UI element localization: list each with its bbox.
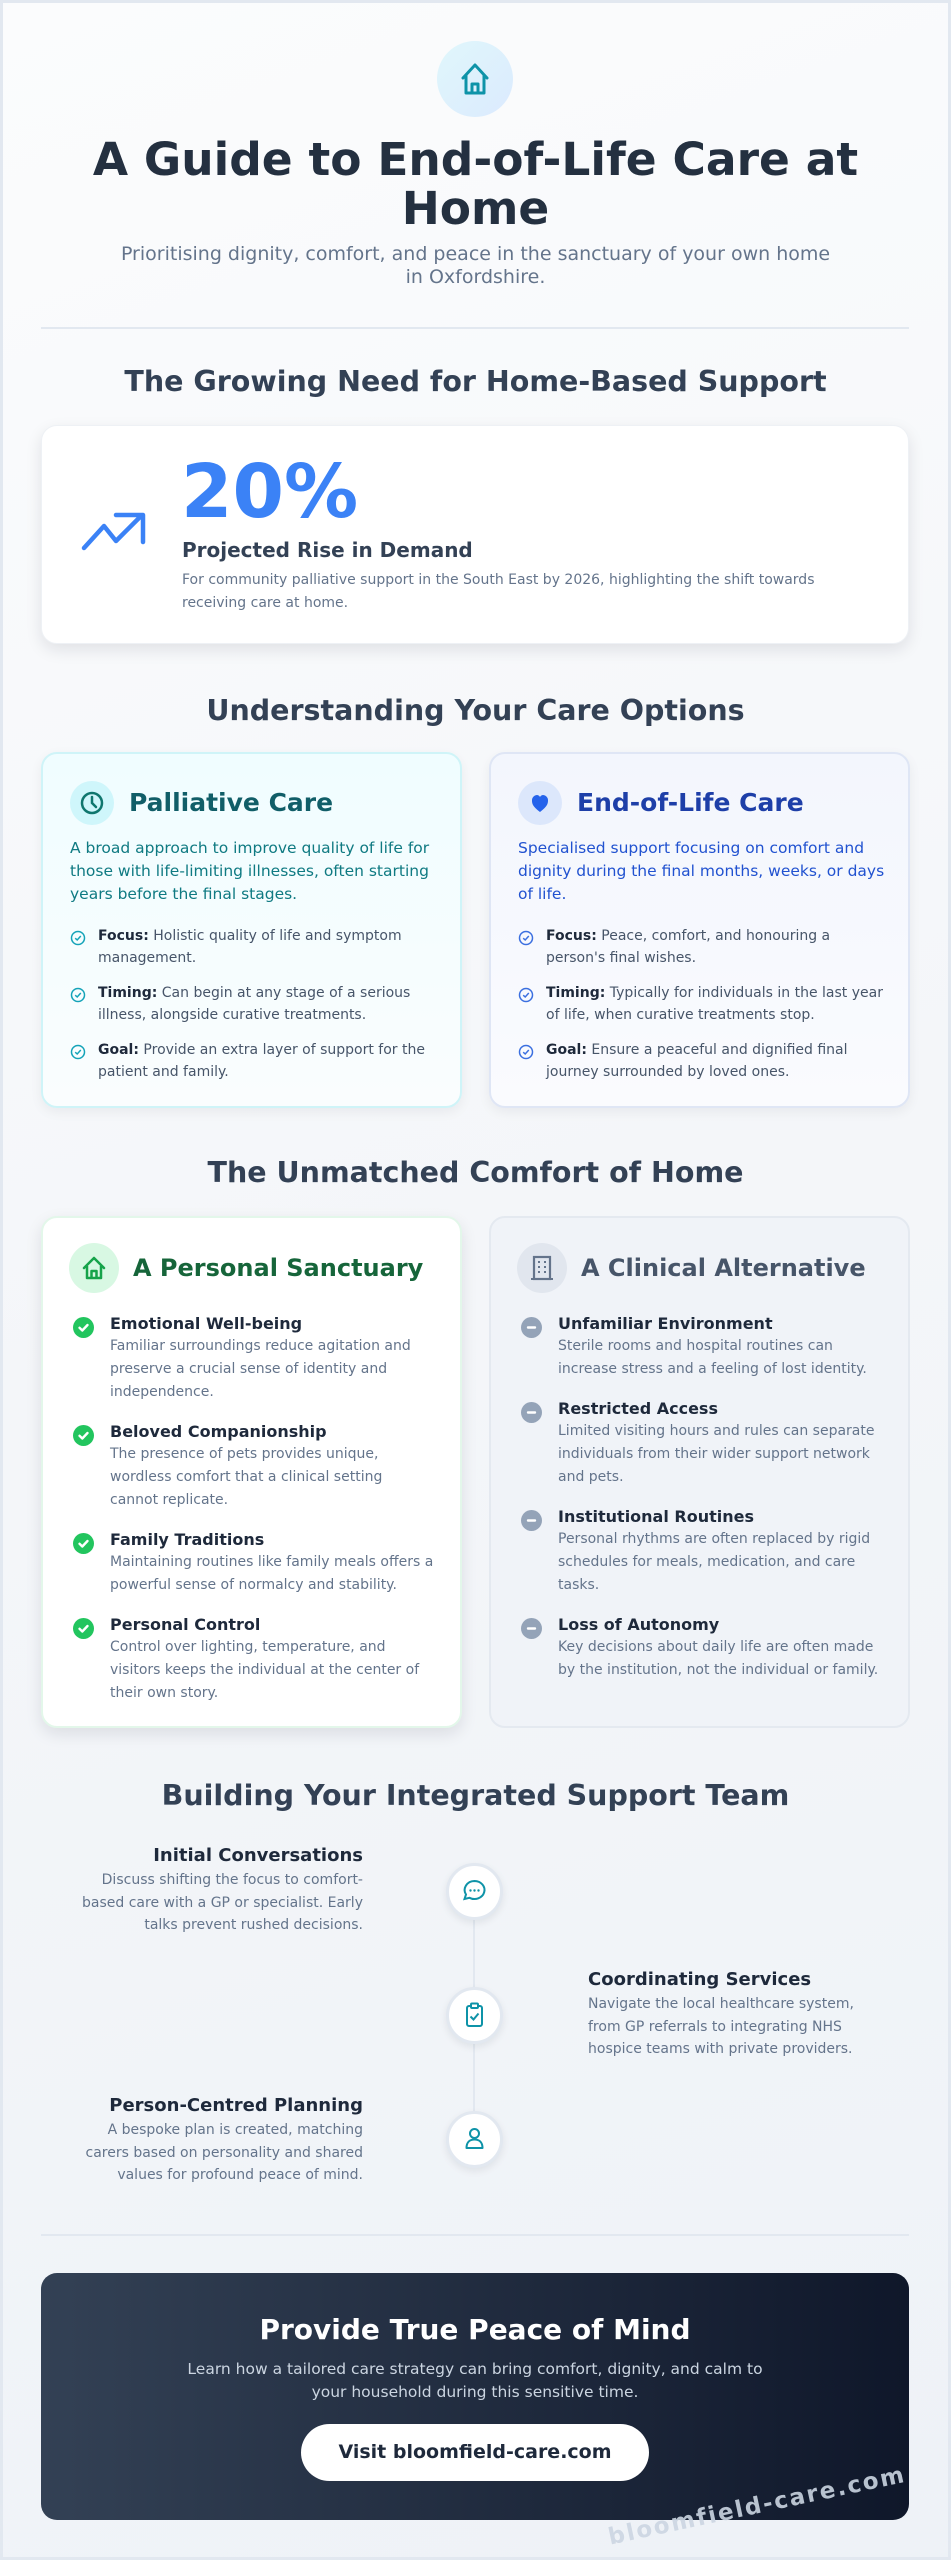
- list: drawbacks: Restricted Access: [558, 1399, 718, 1418]
- step: initial conversations: Initial Conversations: [153, 1845, 363, 1866]
- card description: A broad approach to improve quality of life for those with life-limiting illnesses, often starting years before the final stages.: [70, 839, 429, 903]
- card title: A Personal Sanctuary: [133, 1254, 423, 1282]
- title: A Guide to End-of-Life Care at: [93, 133, 858, 186]
- cta title: Provide True Peace of Mind: [259, 2313, 691, 2346]
- icon: person: [446, 2111, 503, 2168]
- stat label: Projected Rise in Demand: [182, 538, 473, 562]
- step: person-centred planning: [86, 2095, 363, 2183]
- list: drawbacks: Personal rhythms are often replaced by rigid schedules for meals, medication, and care tasks.: [558, 1531, 870, 1593]
- list: benefits: Familiar surroundings reduce agitation and preserve a crucial sense of identity and independence.: [110, 1338, 411, 1400]
- list: benefits: Beloved Companionship: [110, 1422, 327, 1441]
- list: benefits: Control over lighting, temperature, and visitors keeps the individual at the center of their own story.: [110, 1639, 419, 1701]
- list: benefits: The presence of pets provides unique, wordless comfort that a clinical setting: [110, 1446, 382, 1485]
- button: [301, 2424, 649, 2481]
- subtitle: Prioritising dignity, comfort, and peace in the sanctuary of your own home in Oxfordshire.: [121, 243, 830, 288]
- panel: stat card: [41, 425, 909, 644]
- list: benefits: Maintaining routines like family meals offers a powerful sense of normalcy and stability.: [110, 1554, 433, 1593]
- list: drawbacks: [521, 1314, 878, 1678]
- title: [93, 133, 858, 235]
- list: drawbacks: Sterile rooms and hospital routines can increase stress and a feeling of lost identity.: [558, 1338, 867, 1377]
- icon: home green: [69, 1243, 119, 1293]
- heading: comfort of home: The Unmatched Comfort of Home: [208, 1156, 743, 1189]
- list: drawbacks: Limited visiting hours and rules can separate individuals from their wider support network and pets.: [558, 1423, 874, 1485]
- list: benefits: [73, 1314, 433, 1701]
- list: Focus: Holistic quality of life and symptom management.: [98, 928, 402, 966]
- icon: house header: [437, 41, 513, 117]
- heading: care options: Understanding Your Care Options: [206, 694, 745, 727]
- icon: building: [517, 1243, 567, 1293]
- step: coordinating services: Navigate the local healthcare system, from GP referrals to integrating NHS hospice teams with private providers.: [588, 1996, 854, 2057]
- list: benefits: Emotional Well-being: [110, 1314, 302, 1333]
- list: drawbacks: Loss of Autonomy: [558, 1615, 719, 1634]
- heading: growing need: The Growing Need for Home-Based Support: [124, 365, 827, 398]
- step: coordinating services: [588, 1969, 854, 2057]
- icon: trending up: [82, 512, 146, 550]
- list: [70, 928, 425, 1080]
- list: Goal: Provide an extra layer of support for the patient and family.: [98, 1042, 425, 1080]
- button: Visit bloomfield-care.com: [338, 2441, 612, 2463]
- cta text: Learn how a tailored care strategy can bring comfort, dignity, and calm to your household during this sensitive time.: [187, 2360, 763, 2401]
- step: coordinating services: Coordinating Services: [588, 1969, 811, 1990]
- watermark: bloomfield-care.com: [606, 2462, 908, 2550]
- list: Goal: Ensure a peaceful and dignified final journey surrounded by loved ones.: [546, 1042, 848, 1080]
- list: Timing: Typically for individuals in the last year of life, when curative treatments stop.: [546, 985, 883, 1023]
- step: initial conversations: Discuss shifting the focus to comfort-based care with a GP or specialist. Early talks prevent rushed decisions.: [82, 1872, 363, 1933]
- step: person-centred planning: Person-Centred Planning: [109, 2095, 363, 2116]
- list: [518, 928, 883, 1080]
- stat description: For community palliative support in the South East by 2026, highlighting the shift towards receiving care at home.: [182, 572, 814, 611]
- stat number: 20%: [181, 449, 358, 535]
- panel: clinical alternative: [489, 1216, 910, 1728]
- list: Focus: Peace, comfort, and honouring a person's final wishes.: [546, 928, 830, 966]
- panel: palliative care: [41, 752, 462, 1108]
- step: initial conversations: [82, 1845, 363, 1933]
- panel: call to action: [41, 2273, 909, 2520]
- heading: support team: Building Your Integrated Support Team: [162, 1779, 789, 1812]
- panel: end-of-life care: [489, 752, 910, 1108]
- step: person-centred planning: A bespoke plan is created, matching carers based on personality and shared values for profound peace of mind.: [86, 2122, 363, 2183]
- card title: Palliative Care: [129, 788, 333, 817]
- card description: Specialised support focusing on comfort and dignity during the final months, weeks, or days of life.: [518, 839, 884, 903]
- icon: clipboard: [446, 1987, 503, 2044]
- list: drawbacks: Institutional Routines: [558, 1507, 754, 1526]
- card title: A Clinical Alternative: [581, 1254, 866, 1282]
- title: Home: [402, 182, 549, 235]
- list: drawbacks: Unfamiliar Environment: [558, 1314, 773, 1333]
- panel: personal sanctuary: [41, 1216, 462, 1728]
- card title: End-of-Life Care: [577, 788, 804, 817]
- list: benefits: cannot replicate.: [110, 1492, 228, 1508]
- list: benefits: Personal Control: [110, 1615, 260, 1634]
- list: benefits: Family Traditions: [110, 1530, 264, 1549]
- list: Timing: Can begin at any stage of a serious illness, alongside curative treatments.: [98, 985, 410, 1023]
- icon: chat: [446, 1863, 503, 1920]
- icon: clock: [70, 781, 114, 825]
- timeline: [82, 1845, 854, 2183]
- icon: heart: [518, 781, 562, 825]
- list: drawbacks: Key decisions about daily life are often made by the institution, not the individual or family.: [558, 1639, 878, 1678]
